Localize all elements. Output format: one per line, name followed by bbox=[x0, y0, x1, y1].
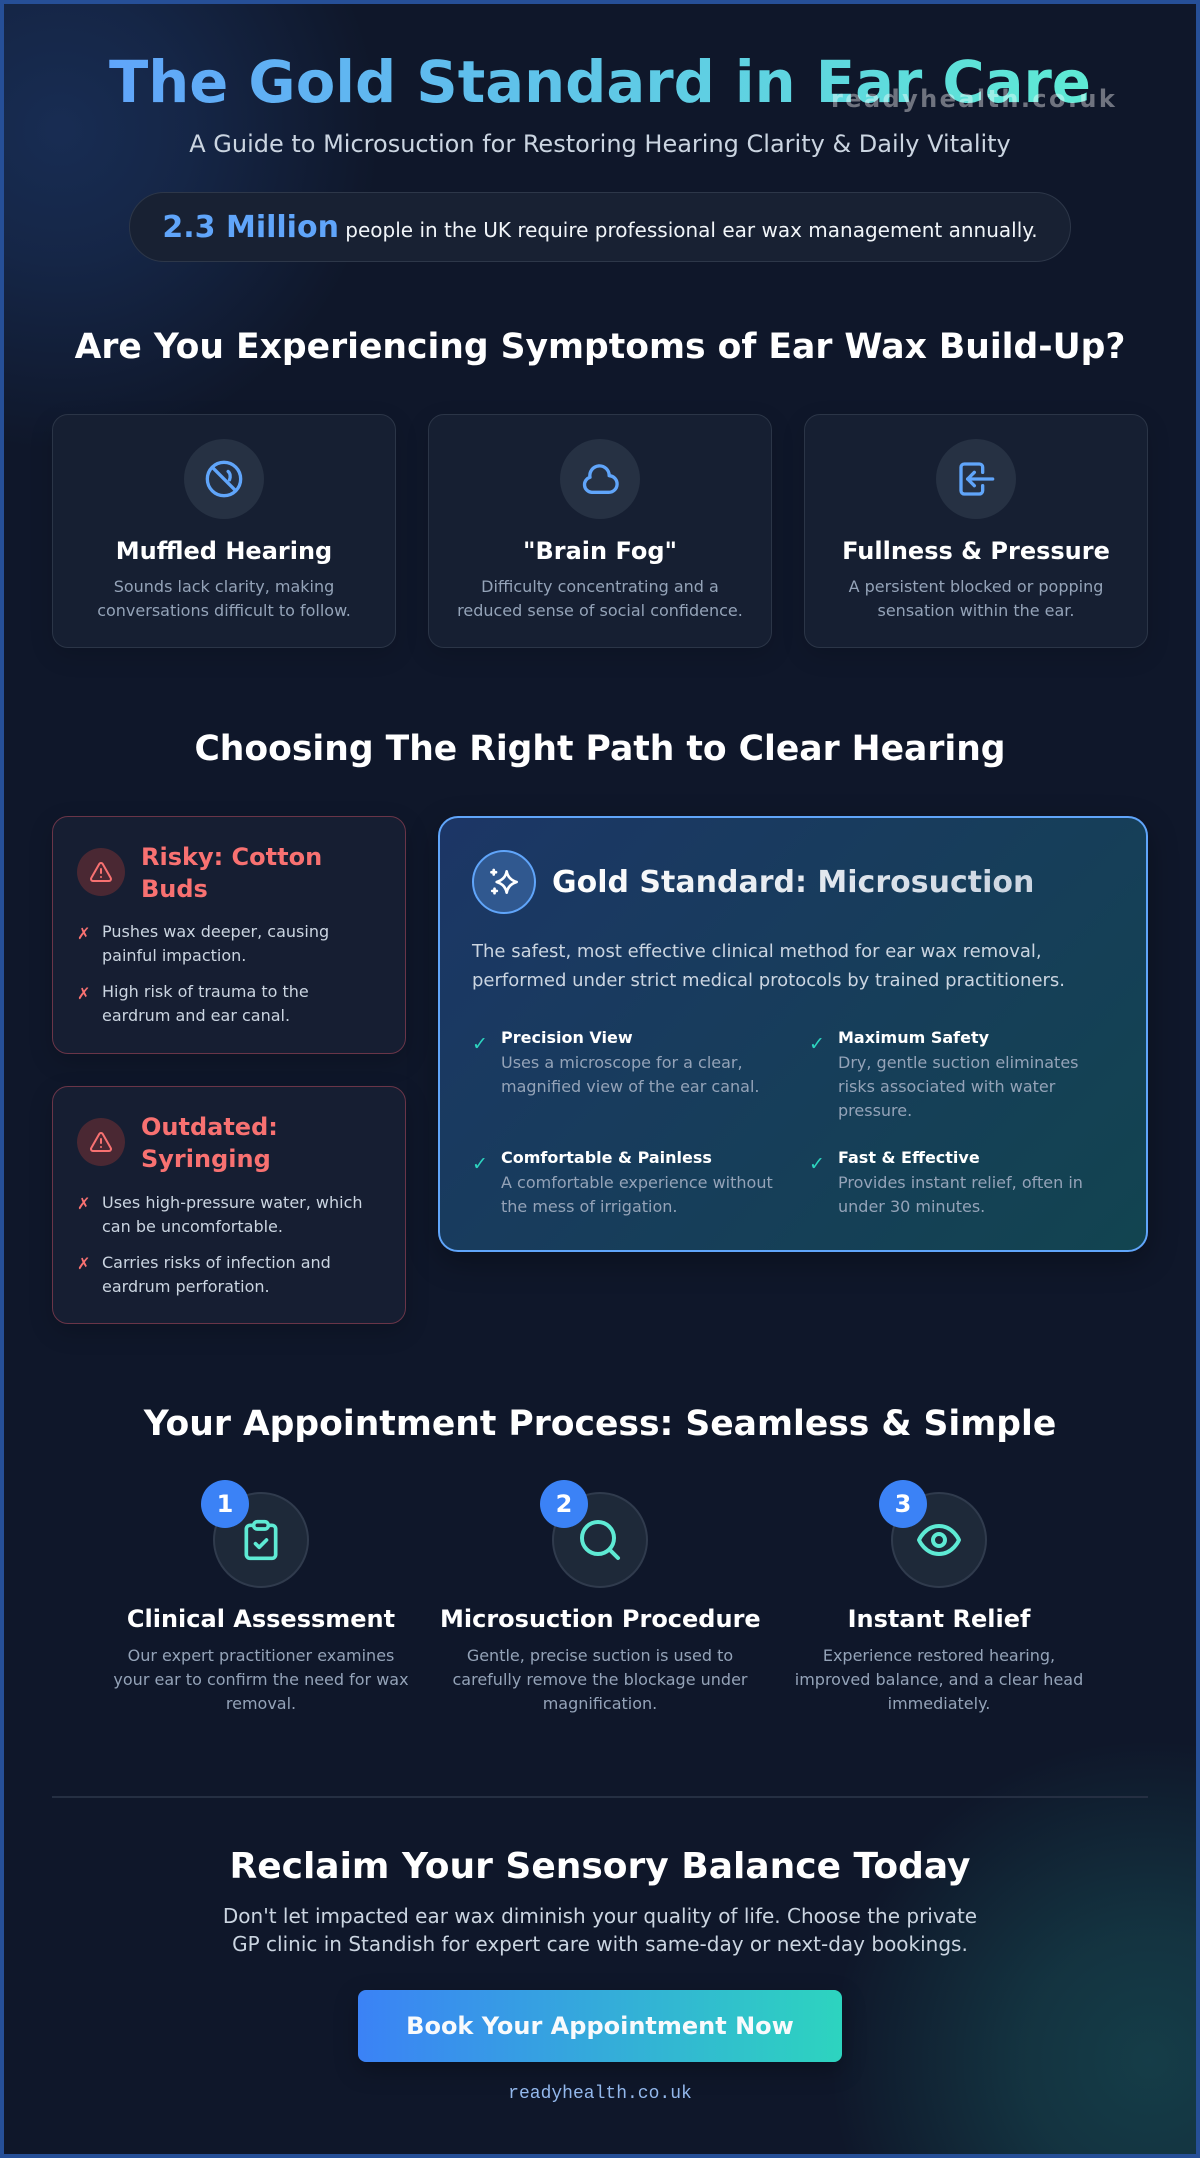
website url: readyhealth.co.uk bbox=[508, 2084, 692, 2104]
panel: fullness and pressure bbox=[804, 414, 1148, 648]
feature: fast: ✓ bbox=[809, 1153, 825, 1175]
panel: syringing: Syringing bbox=[141, 1145, 271, 1173]
text: call to action: Don't let impacted ear wax diminish your quality of life. Choose the private bbox=[223, 1904, 977, 1928]
panel: cotton buds: ✗ bbox=[77, 924, 90, 943]
heading: choosing: Choosing The Right Path to Clear Hearing bbox=[194, 729, 1006, 769]
panel: brain fog: Difficulty concentrating and a bbox=[481, 577, 719, 596]
step 2 icon bbox=[552, 1492, 648, 1588]
button: book appointment: Book Your Appointment Now bbox=[406, 2012, 794, 2040]
panel: muffled hearing: conversations difficult to follow. bbox=[97, 601, 351, 620]
panel: microsuction bbox=[438, 816, 1148, 1252]
title: The Gold Standard in Ear Care bbox=[109, 49, 1091, 116]
heading: process: Your Appointment Process: Seamless & Simple bbox=[144, 1404, 1056, 1444]
panel: syringing: ✗ bbox=[77, 1194, 90, 1213]
step 3 text: Experience restored hearing, bbox=[823, 1646, 1055, 1665]
feature: comfortable: A comfortable experience without bbox=[501, 1173, 773, 1192]
feature: comfortable: Comfortable & Painless bbox=[501, 1148, 712, 1167]
step 1 text: removal. bbox=[226, 1694, 296, 1713]
step 2 text bbox=[452, 1646, 748, 1713]
panel: syringing: Uses high-pressure water, which bbox=[102, 1193, 363, 1212]
step 1 text: your ear to confirm the need for wax bbox=[113, 1670, 409, 1689]
stat pill bbox=[129, 192, 1071, 262]
heading: symptoms: Are You Experiencing Symptoms of Ear Wax Build-Up? bbox=[75, 327, 1125, 367]
panel: syringing bbox=[52, 1086, 406, 1324]
panel: cotton buds: painful impaction. bbox=[102, 946, 246, 965]
panel: brain fog: reduced sense of social confidence. bbox=[457, 601, 743, 620]
icon: muffled hearing bbox=[184, 439, 264, 519]
icon: sparkles bbox=[472, 850, 536, 914]
icon: warning bbox=[77, 1118, 125, 1166]
step 3 badge bbox=[879, 1480, 927, 1528]
panel: syringing: can be uncomfortable. bbox=[102, 1217, 283, 1236]
feature: precision view: Precision View bbox=[501, 1028, 633, 1047]
feature: precision view: magnified view of the ear canal. bbox=[501, 1077, 759, 1096]
feature: maximum safety: risks associated with water bbox=[838, 1077, 1055, 1096]
feature: precision view bbox=[472, 1028, 759, 1096]
feature: fast: under 30 minutes. bbox=[838, 1197, 985, 1216]
panel: muffled hearing: Muffled Hearing bbox=[116, 537, 332, 565]
text: call to action bbox=[223, 1904, 977, 1956]
panel: fullness and pressure: A persistent blocked or popping bbox=[849, 577, 1103, 596]
panel: fullness and pressure: sensation within the ear. bbox=[878, 601, 1074, 620]
step 2 title: Microsuction Procedure bbox=[440, 1605, 761, 1633]
step 2 text: magnification. bbox=[543, 1694, 657, 1713]
feature: precision view: ✓ bbox=[472, 1033, 488, 1055]
watermark: readyhealth.co.uk bbox=[831, 85, 1117, 113]
feature: comfortable bbox=[472, 1148, 773, 1216]
panel: cotton buds bbox=[52, 816, 406, 1054]
icon: cloud bbox=[560, 439, 640, 519]
subtitle: A Guide to Microsuction for Restoring Hearing Clarity & Daily Vitality bbox=[189, 130, 1011, 158]
feature: maximum safety: pressure. bbox=[838, 1101, 912, 1120]
icon: warning bbox=[77, 848, 125, 896]
step 3 text: immediately. bbox=[888, 1694, 990, 1713]
panel: muffled hearing bbox=[52, 414, 396, 648]
panel: cotton buds: High risk of trauma to the bbox=[102, 982, 309, 1001]
step 3 icon bbox=[891, 1492, 987, 1588]
step 1 icon bbox=[213, 1492, 309, 1588]
heading: microsuction: Gold Standard: Microsuction bbox=[552, 865, 1034, 900]
step 3 text bbox=[795, 1646, 1083, 1713]
feature: fast: Provides instant relief, often in bbox=[838, 1173, 1083, 1192]
icon: pressure bbox=[936, 439, 1016, 519]
panel: cotton buds: Buds bbox=[141, 875, 208, 903]
step 2 text: Gentle, precise suction is used to bbox=[467, 1646, 733, 1665]
step 1 title: Clinical Assessment bbox=[127, 1605, 395, 1633]
panel: syringing: eardrum perforation. bbox=[102, 1277, 270, 1296]
panel: syringing: Carries risks of infection and bbox=[102, 1253, 331, 1272]
text: intro: The safest, most effective clinical method for ear wax removal, bbox=[472, 941, 1042, 962]
stat pill: 2.3 Million people in the UK require professional ear wax management annually. bbox=[162, 210, 1038, 245]
panel: cotton buds: eardrum and ear canal. bbox=[102, 1006, 290, 1025]
panel: cotton buds: Pushes wax deeper, causing bbox=[102, 922, 329, 941]
text: call to action: GP clinic in Standish for expert care with same-day or next-day bookings. bbox=[232, 1932, 968, 1956]
panel: syringing: Outdated: bbox=[141, 1113, 278, 1141]
step 2 badge bbox=[540, 1480, 588, 1528]
panel: brain fog: "Brain Fog" bbox=[523, 537, 677, 565]
step 2 badge: 2 bbox=[556, 1490, 572, 1518]
feature: maximum safety: ✓ bbox=[809, 1033, 825, 1055]
feature: precision view: Uses a microscope for a clear, bbox=[501, 1053, 743, 1072]
step 3 title: Instant Relief bbox=[848, 1605, 1030, 1633]
feature: maximum safety: Dry, gentle suction eliminates bbox=[838, 1053, 1078, 1072]
feature: maximum safety: Maximum Safety bbox=[838, 1028, 989, 1047]
panel: syringing: ✗ bbox=[77, 1254, 90, 1273]
feature: fast: Fast & Effective bbox=[838, 1148, 980, 1167]
panel: fullness and pressure: Fullness & Pressure bbox=[842, 537, 1110, 565]
heading: call to action: Reclaim Your Sensory Balance Today bbox=[229, 1846, 970, 1887]
panel: cotton buds: Risky: Cotton bbox=[141, 843, 322, 871]
text: intro bbox=[472, 941, 1065, 991]
step 2 text: carefully remove the blockage under bbox=[452, 1670, 748, 1689]
step 1 text: Our expert practitioner examines bbox=[128, 1646, 394, 1665]
text: intro: performed under strict medical protocols by trained practitioners. bbox=[472, 970, 1065, 991]
step 1 badge: 1 bbox=[217, 1490, 233, 1518]
button: book appointment bbox=[358, 1990, 842, 2062]
feature: fast bbox=[809, 1148, 1083, 1216]
step 1 badge bbox=[201, 1480, 249, 1528]
step 3 text: improved balance, and a clear head bbox=[795, 1670, 1083, 1689]
feature: comfortable: ✓ bbox=[472, 1153, 488, 1175]
feature: comfortable: the mess of irrigation. bbox=[501, 1197, 678, 1216]
panel: brain fog bbox=[428, 414, 772, 648]
feature: maximum safety bbox=[809, 1028, 1078, 1120]
step 3 badge: 3 bbox=[895, 1490, 911, 1518]
panel: cotton buds: ✗ bbox=[77, 984, 90, 1003]
panel: muffled hearing: Sounds lack clarity, making bbox=[114, 577, 334, 596]
step 1 text bbox=[113, 1646, 409, 1713]
